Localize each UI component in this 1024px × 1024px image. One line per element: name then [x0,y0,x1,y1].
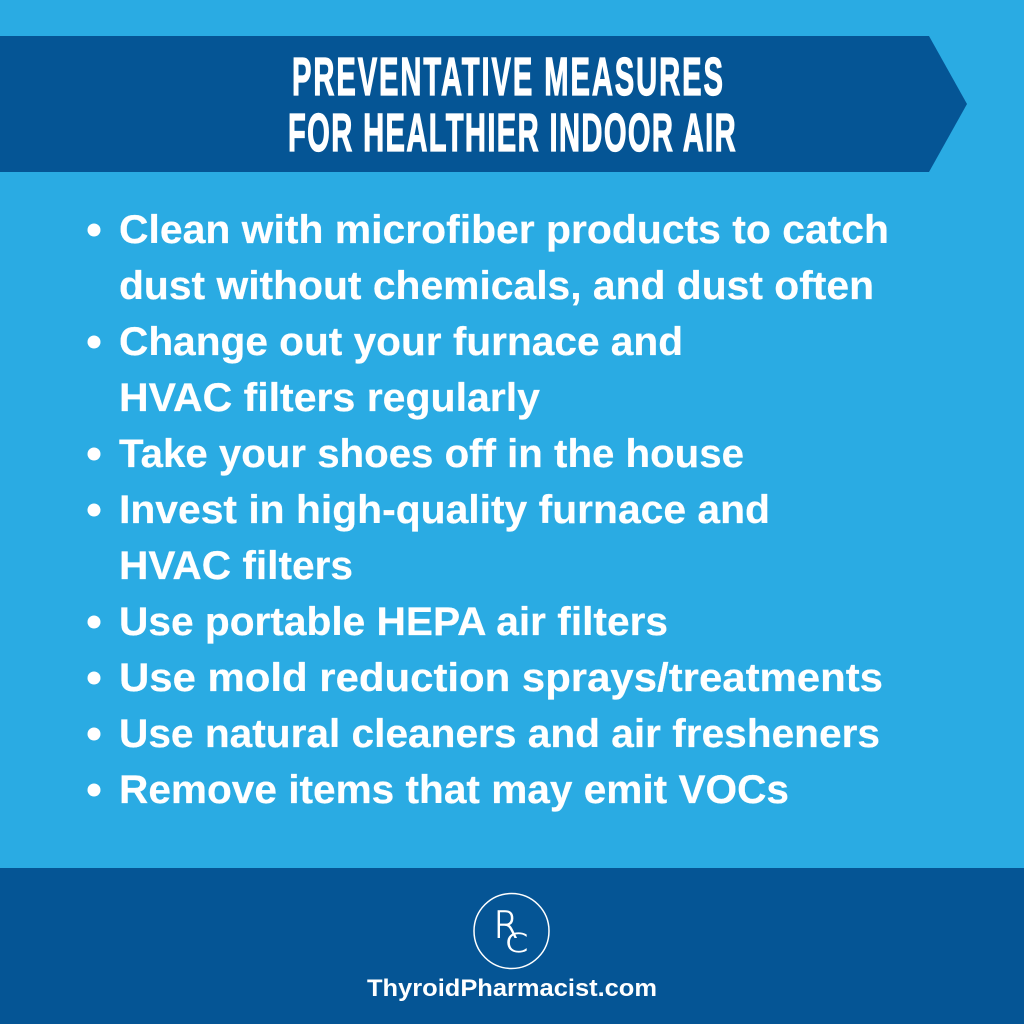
footer band [0,868,1024,1024]
item: shoes: Take your shoes off in the house [119,432,744,476]
item: mold: Use mold reduction sprays/treatments [119,656,883,700]
header banner arrow [0,36,967,172]
item: microfiber: dust without chemicals, and dust often [119,264,874,308]
bullet list [88,208,889,812]
website URL: ThyroidPharmacist.com [367,975,657,1002]
title: FOR HEALTHIER INDOOR AIR [288,104,736,163]
item: natural cleaners: Use natural cleaners and air fresheners [119,712,880,756]
item: change filters [88,320,683,420]
item: high-quality filters: HVAC filters [119,544,353,588]
item: microfiber [88,208,889,308]
item: change filters: HVAC filters regularly [119,376,541,420]
item: microfiber: Clean with microfiber products to catch [119,208,889,252]
logo: RC monogram: C [505,929,528,959]
item: high-quality filters [88,488,770,588]
title [288,48,736,163]
item: change filters: Change out your furnace and [119,320,683,364]
item: high-quality filters: Invest in high-quality furnace and [119,488,770,532]
title: PREVENTATIVE MEASURES [292,48,723,107]
item: HEPA: Use portable HEPA air filters [119,600,668,644]
logo: RC monogram: R [494,904,518,947]
item: VOCs: Remove items that may emit VOCs [119,768,789,812]
logo: RC monogram [474,894,549,968]
